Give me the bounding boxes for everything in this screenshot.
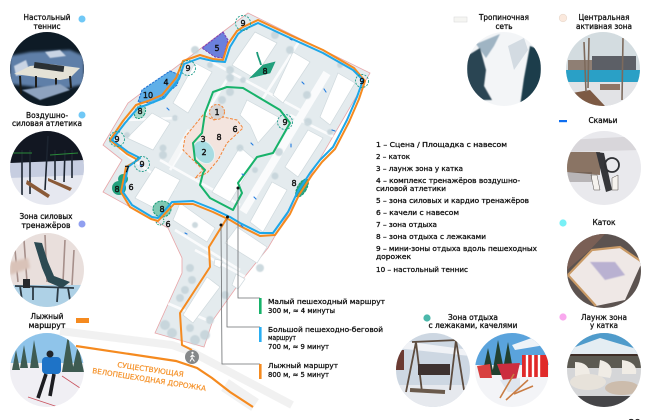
plan numbers: 6: [128, 183, 134, 192]
route legend: ski route: [259, 361, 338, 379]
panel: strength equipment zone: [10, 212, 86, 307]
plan numbers: 1: [214, 108, 220, 117]
panel: benches: Скамьи: [588, 116, 618, 125]
photo: cross-country skier: [10, 333, 84, 407]
panel: outdoor fitness: [10, 111, 86, 205]
photo: swing in snow: [396, 333, 470, 407]
panel: ski route: маршрут: [28, 321, 66, 330]
panel: table tennis: [10, 13, 86, 106]
route legend: large pedestrian and running route: 700 м, ≈ 9 минут: [268, 342, 329, 351]
central active zone: [183, 104, 243, 178]
plan numbers: 8: [262, 67, 268, 76]
zone 5: strength and cardio: [202, 32, 228, 58]
rest mini-zone markers: [110, 16, 368, 172]
label: existing bike path, line one: СУЩЕСТВУЮЩАЯ: [117, 360, 184, 379]
panel: outdoor fitness: силовая атлетика: [12, 119, 82, 128]
plan numbers: 9: [359, 77, 365, 86]
numbered legend: 4 – комплекс тренажёров воздушно-: [376, 176, 520, 185]
existing bike path line: [76, 346, 253, 407]
numbered legend: [376, 140, 538, 274]
plan numbers: 9: [240, 19, 246, 28]
panel: ice rink: Каток: [592, 218, 616, 227]
site plan map: [103, 13, 370, 350]
panel: table tennis: теннис: [34, 22, 60, 31]
small walking route: green: [193, 87, 290, 210]
numbered legend: дорожек: [376, 252, 412, 261]
panel: lounge zone by the rink: [559, 313, 641, 407]
leader lines and route dots: [220, 186, 260, 364]
rink: [189, 136, 219, 168]
numbered legend: 1 – Сцена / Площадка с навесом: [376, 140, 507, 149]
panel: ski route: [10, 312, 89, 407]
plan numbers: 3: [200, 135, 206, 144]
panel: table tennis: Настольный: [24, 13, 71, 22]
panel: recreation zone with loungers and swings: [396, 313, 549, 407]
plan numbers: 5: [214, 44, 220, 53]
label: existing bike path, line two: ВЕЛОПЕШЕХОДНАЯ ДОРОЖКА: [92, 366, 207, 393]
panel: trail network: [454, 13, 541, 106]
plan numbers: 8: [291, 179, 297, 188]
panel: trail network: Тропиночная: [478, 13, 529, 22]
route legend: large pedestrian and running route: маршрут: [268, 333, 296, 342]
photo: rink aerial view: [567, 234, 642, 308]
photo: table tennis table: [10, 32, 84, 106]
plan numbers: [114, 19, 365, 229]
panel: trail network: сеть: [496, 22, 513, 31]
panel: recreation zone with loungers and swings: с лежаками, качелями: [428, 321, 518, 330]
panel: strength equipment zone: Зона силовых: [20, 212, 73, 221]
panel: benches: [559, 116, 641, 205]
panel: lounge zone by the rink: у катка: [590, 321, 618, 330]
plan numbers: 9: [185, 64, 191, 73]
numbered legend: 10 – настольный теннис: [376, 265, 468, 274]
plan numbers: 9: [139, 160, 145, 169]
numbered legend: 5 – зона силовых и кардио тренажёров: [376, 196, 529, 205]
panel: central active zone: Центральная: [578, 13, 630, 22]
plan numbers: 9: [282, 118, 288, 127]
route legend: small pedestrian route: Малый пешеходный маршрут: [268, 297, 385, 306]
plan numbers: 9: [114, 135, 120, 144]
numbered legend: 9 – мини-зоны отдыха вдоль пешеходных: [376, 244, 538, 253]
numbered legend: силовой атлетики: [376, 184, 446, 193]
panel: recreation zone with loungers and swings: Зона отдыха: [448, 313, 498, 322]
panel: ski route: Лыжный: [30, 312, 64, 321]
panel: lounge zone by the rink: Лаунж зона: [581, 313, 627, 322]
photo: red striped deckchairs: [475, 333, 549, 407]
numbered legend: 7 – зона отдыха: [376, 220, 437, 229]
zones 4 and 10: outdoor fitness and table tennis: [138, 71, 180, 103]
zones 7 and 8: recreation with loungers: [112, 52, 311, 225]
avenues and inner paths: [120, 40, 340, 330]
photo: central square: [566, 32, 640, 106]
plan numbers: 6: [165, 220, 171, 229]
photo: workout bars: [10, 131, 84, 205]
route legend: large pedestrian and running route: [259, 325, 383, 351]
icon: pedestrian crossing: [185, 350, 199, 364]
large walking and running route: blue: [112, 23, 363, 233]
trees: [124, 31, 343, 345]
route legend: small pedestrian route: 300 м, ≈ 4 минуты: [268, 306, 335, 315]
panel: ice rink: [559, 218, 642, 308]
benches on the plan: [140, 39, 335, 234]
panel: outdoor fitness: Воздушно-: [26, 111, 68, 120]
site ground with pink boundary: [103, 13, 370, 347]
plan numbers: 2: [201, 148, 207, 157]
photo: snowy bench with skates: [567, 131, 641, 205]
panel: central active zone: [559, 13, 640, 106]
numbered legend: 8 – зона отдыха с лежаками: [376, 232, 486, 241]
plan numbers: 8: [159, 205, 165, 214]
panel: central active zone: активная зона: [576, 22, 632, 31]
plan numbers: 4: [163, 78, 169, 87]
panel: strength equipment zone: тренажёров: [22, 221, 71, 230]
buildings: [127, 32, 355, 323]
route legend: small pedestrian route: [259, 297, 385, 315]
plan numbers: 10: [143, 91, 153, 100]
numbered legend: 3 – лаунж зона у катка: [376, 164, 463, 173]
numbered legend: 6 – качели с навесом: [376, 208, 459, 217]
plan numbers: 8: [137, 107, 143, 116]
road: existing paved strip: [60, 331, 292, 405]
plan numbers: 7: [124, 165, 130, 174]
ski route: orange: [110, 20, 365, 350]
photo: white lounge furniture: [567, 333, 641, 407]
route legend: ski route: Лыжный маршрут: [268, 361, 338, 370]
numbered legend: 2 – каток: [376, 152, 411, 161]
photo: snowy slope with firs: [467, 32, 541, 106]
route legend: ski route: 800 м, ≈ 5 минут: [268, 370, 329, 379]
plan numbers: 6: [232, 125, 238, 134]
plan numbers: 8: [114, 185, 120, 194]
route legend: large pedestrian and running route: Большой пешеходно-беговой: [268, 325, 383, 334]
plan numbers: 8: [216, 133, 222, 142]
photo: athlete on parallel bars: [10, 233, 84, 307]
